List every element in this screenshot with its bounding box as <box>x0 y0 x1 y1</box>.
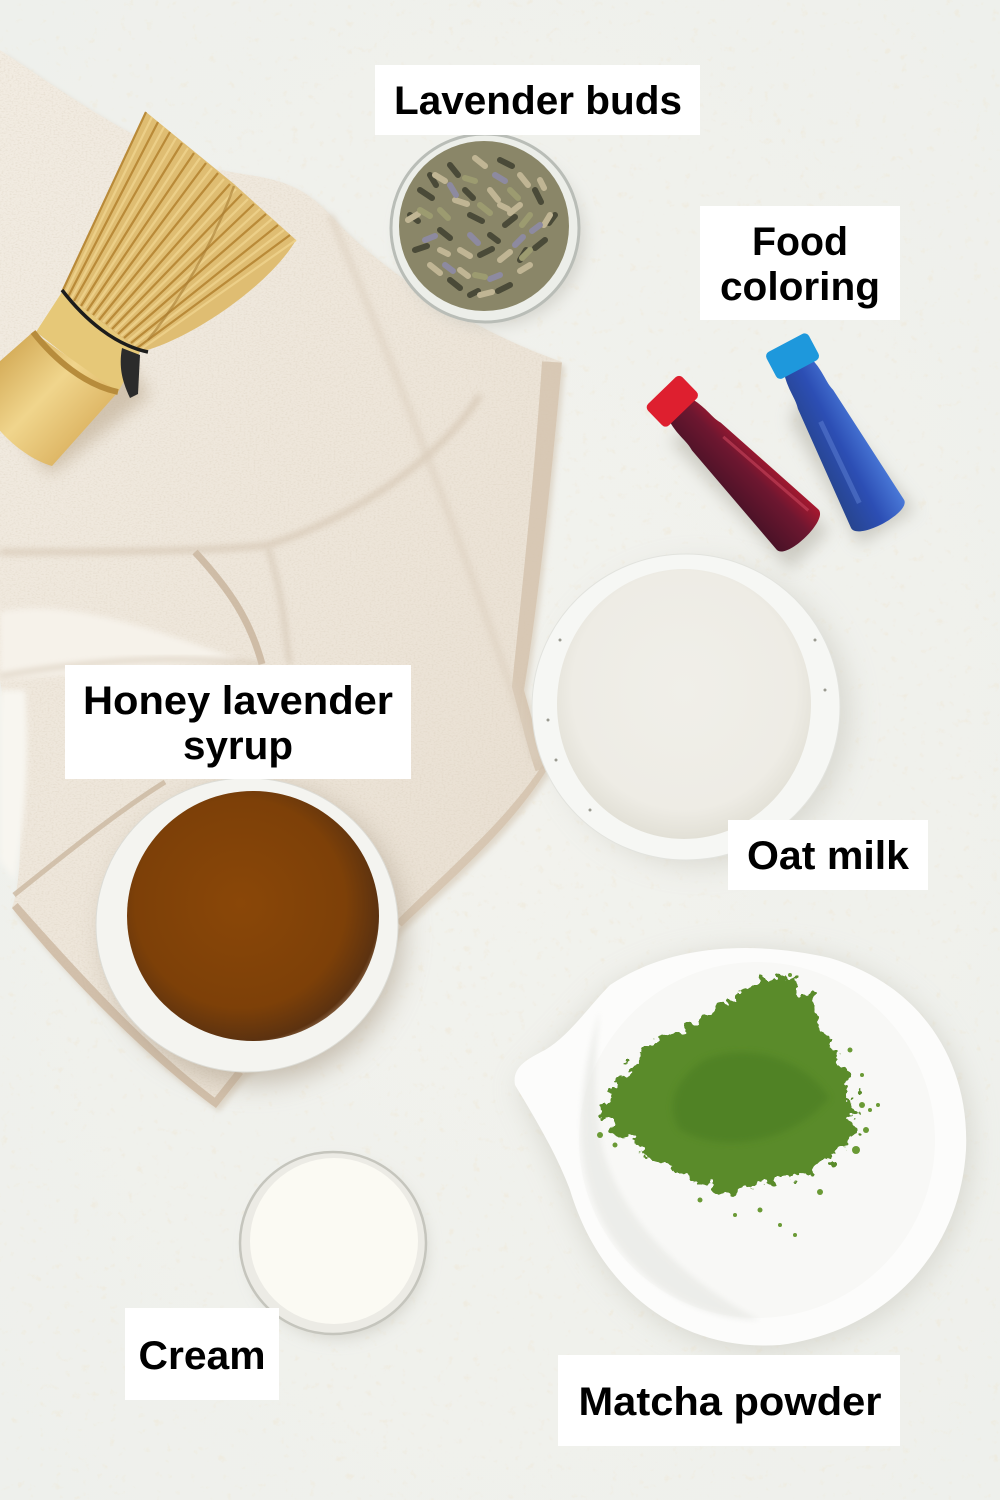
lavender buds bowl <box>391 134 584 326</box>
label: Oat milk: Oat milk <box>747 834 910 878</box>
label: Cream <box>125 1308 279 1400</box>
red bottle <box>642 370 826 558</box>
linen napkin <box>0 40 570 1120</box>
label: Matcha powder: Matcha powder <box>578 1380 882 1424</box>
label: Food coloring: Food <box>752 220 848 264</box>
bamboo whisk <box>0 112 296 475</box>
label: Food coloring: coloring <box>720 265 880 309</box>
matcha powder pile <box>599 971 854 1190</box>
label: Lavender buds <box>375 65 700 135</box>
blue bottle <box>760 328 909 538</box>
honey lavender syrup bowl <box>96 778 403 1083</box>
label: Cream: Cream <box>138 1334 266 1378</box>
label: Matcha powder <box>558 1355 900 1446</box>
oat milk bowl <box>532 554 850 865</box>
food coloring bottles <box>642 328 915 570</box>
matcha mixing bowl with powder <box>515 948 970 1352</box>
cream glass <box>240 1152 426 1338</box>
label: Lavender buds: Lavender buds <box>394 79 682 123</box>
label: Honey lavender syrup: syrup <box>183 724 293 768</box>
label: Honey lavender syrup <box>65 665 411 779</box>
label: Honey lavender syrup: Honey lavender <box>83 679 393 723</box>
label: Food coloring <box>700 206 900 320</box>
label: Oat milk <box>728 820 928 890</box>
